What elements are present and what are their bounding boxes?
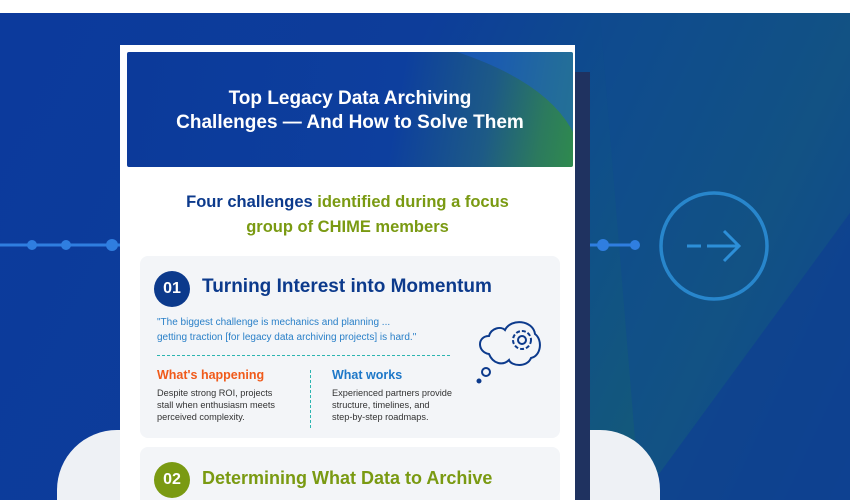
text: what's happening: perceived complexity.	[157, 412, 245, 422]
text: what works: structure, timelines, and	[332, 400, 430, 410]
heading 02: Determining What Data to Archive	[202, 468, 492, 488]
card	[120, 45, 575, 500]
quote: "The biggest challenge is mechanics and planning ...	[157, 317, 390, 328]
quote	[157, 317, 416, 343]
timeline right	[590, 239, 640, 251]
subtitle: group of CHIME members	[246, 218, 449, 236]
heading 01: Turning Interest into Momentum	[202, 276, 492, 297]
text: what's happening: What's happening	[157, 368, 264, 382]
text: what's happening: stall when enthusiasm meets	[157, 400, 275, 410]
text: what works	[332, 368, 452, 422]
number badge 02	[154, 462, 190, 498]
header banner	[127, 52, 573, 167]
text: what's happening	[157, 368, 275, 422]
title	[176, 88, 524, 133]
panel: challenge 02	[140, 447, 560, 500]
title: Top Legacy Data Archiving	[229, 88, 471, 109]
text: what works: Experienced partners provide	[332, 388, 452, 398]
card shadow	[560, 72, 590, 500]
title: Challenges — And How to Solve Them	[176, 112, 524, 133]
icon: arrow circle	[659, 191, 769, 301]
icon: cloud gear	[476, 321, 541, 384]
text: what works: What works	[332, 368, 402, 382]
number badge 02: 02	[163, 471, 181, 488]
panel: challenge 01	[140, 256, 560, 438]
text: what's happening: Despite strong ROI, projects	[157, 388, 272, 398]
number badge 01	[154, 271, 190, 307]
subtitle: Four challenges identified during a focus	[186, 193, 509, 211]
subtitle	[186, 193, 509, 236]
quote: getting traction [for legacy data archiving projects] is hard."	[157, 332, 416, 343]
number badge 01: 01	[163, 280, 181, 297]
bottom cloud shape	[57, 430, 660, 500]
text: what works: step-by-step roadmaps.	[332, 412, 429, 422]
timeline left	[0, 239, 120, 251]
